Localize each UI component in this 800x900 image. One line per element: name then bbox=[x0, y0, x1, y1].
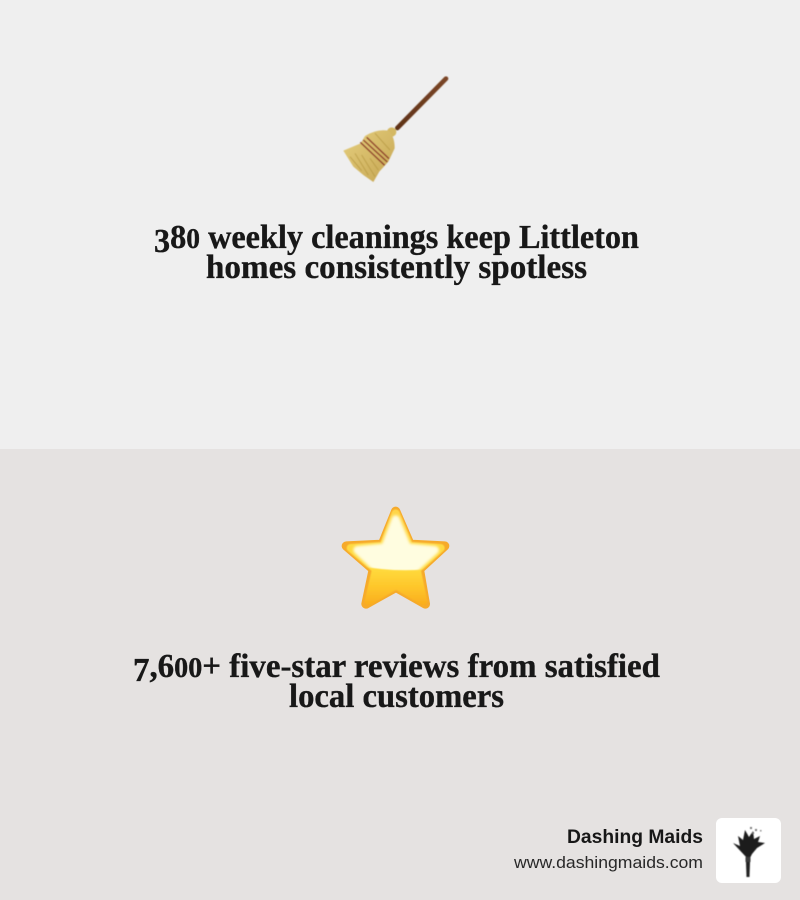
icon: feather duster bbox=[733, 827, 765, 877]
icon: broom bbox=[343, 79, 446, 182]
heading: weekly cleanings: 3 bbox=[154, 223, 170, 260]
heading: five-star reviews: 7 bbox=[133, 652, 149, 689]
heading: five-star reviews bbox=[133, 648, 660, 715]
heading: five-star reviews: ,6 bbox=[149, 648, 174, 685]
logo tile bbox=[716, 818, 781, 883]
heading: weekly cleanings: homes consistently spotless bbox=[206, 249, 587, 286]
heading: five-star reviews: local customers bbox=[289, 678, 504, 715]
heading: weekly cleanings: 8 bbox=[170, 219, 186, 256]
heading: weekly cleanings bbox=[154, 219, 639, 286]
brand name: Dashing Maids bbox=[567, 827, 703, 848]
heading: weekly cleanings: 0 weekly cleanings keep Littleton bbox=[186, 219, 663, 256]
icon: star bbox=[346, 511, 445, 604]
panel: bottom section bbox=[0, 449, 800, 900]
heading: five-star reviews: 00+ five-star reviews from satisfied bbox=[174, 648, 675, 685]
panel: top section bbox=[0, 0, 800, 449]
website url: www.dashingmaids.com bbox=[513, 854, 703, 872]
